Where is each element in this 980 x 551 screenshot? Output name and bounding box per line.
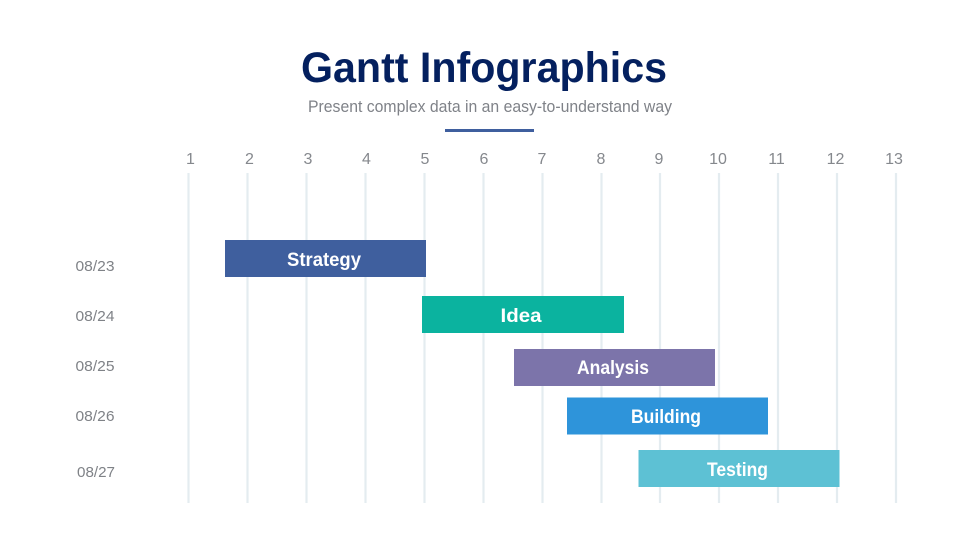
bar: Building xyxy=(567,398,768,434)
title: Gantt Infographics xyxy=(301,44,667,92)
timeline numbers: 6 xyxy=(480,151,489,168)
timeline numbers: 2 xyxy=(245,151,254,168)
bar: Analysis xyxy=(514,349,715,386)
date labels: 08/24 xyxy=(76,308,114,325)
bar: Strategy xyxy=(225,240,426,277)
date labels: 08/26 xyxy=(76,408,114,425)
timeline numbers: 13 xyxy=(885,151,903,168)
timeline numbers: 7 xyxy=(538,151,547,168)
timeline numbers: 3 xyxy=(304,151,313,168)
title accent underline xyxy=(445,129,534,132)
timeline numbers: 1 xyxy=(186,151,195,168)
timeline numbers: 10 xyxy=(709,151,727,168)
bar: Building: Building xyxy=(631,407,701,428)
bar: Testing: Testing xyxy=(707,460,768,481)
date labels: 08/25 xyxy=(76,358,114,375)
bar: Analysis: Analysis xyxy=(577,358,649,379)
date labels: 08/23 xyxy=(76,258,114,275)
timeline numbers: 8 xyxy=(597,151,606,168)
bar: Idea xyxy=(422,296,624,333)
timeline numbers: 12 xyxy=(827,151,844,168)
timeline numbers: 11 xyxy=(768,151,785,168)
date labels xyxy=(76,258,115,481)
timeline numbers: 9 xyxy=(655,151,664,168)
bar: Strategy: Strategy xyxy=(287,250,361,271)
subtitle: Present complex data in an easy-to-understand way xyxy=(308,98,673,116)
bar: Idea: Idea xyxy=(500,306,542,327)
timeline numbers: 4 xyxy=(362,151,371,168)
date labels: 08/27 xyxy=(77,464,115,481)
bar: Testing xyxy=(638,450,840,487)
timeline numbers: 5 xyxy=(421,151,430,168)
timeline numbers xyxy=(186,151,903,168)
